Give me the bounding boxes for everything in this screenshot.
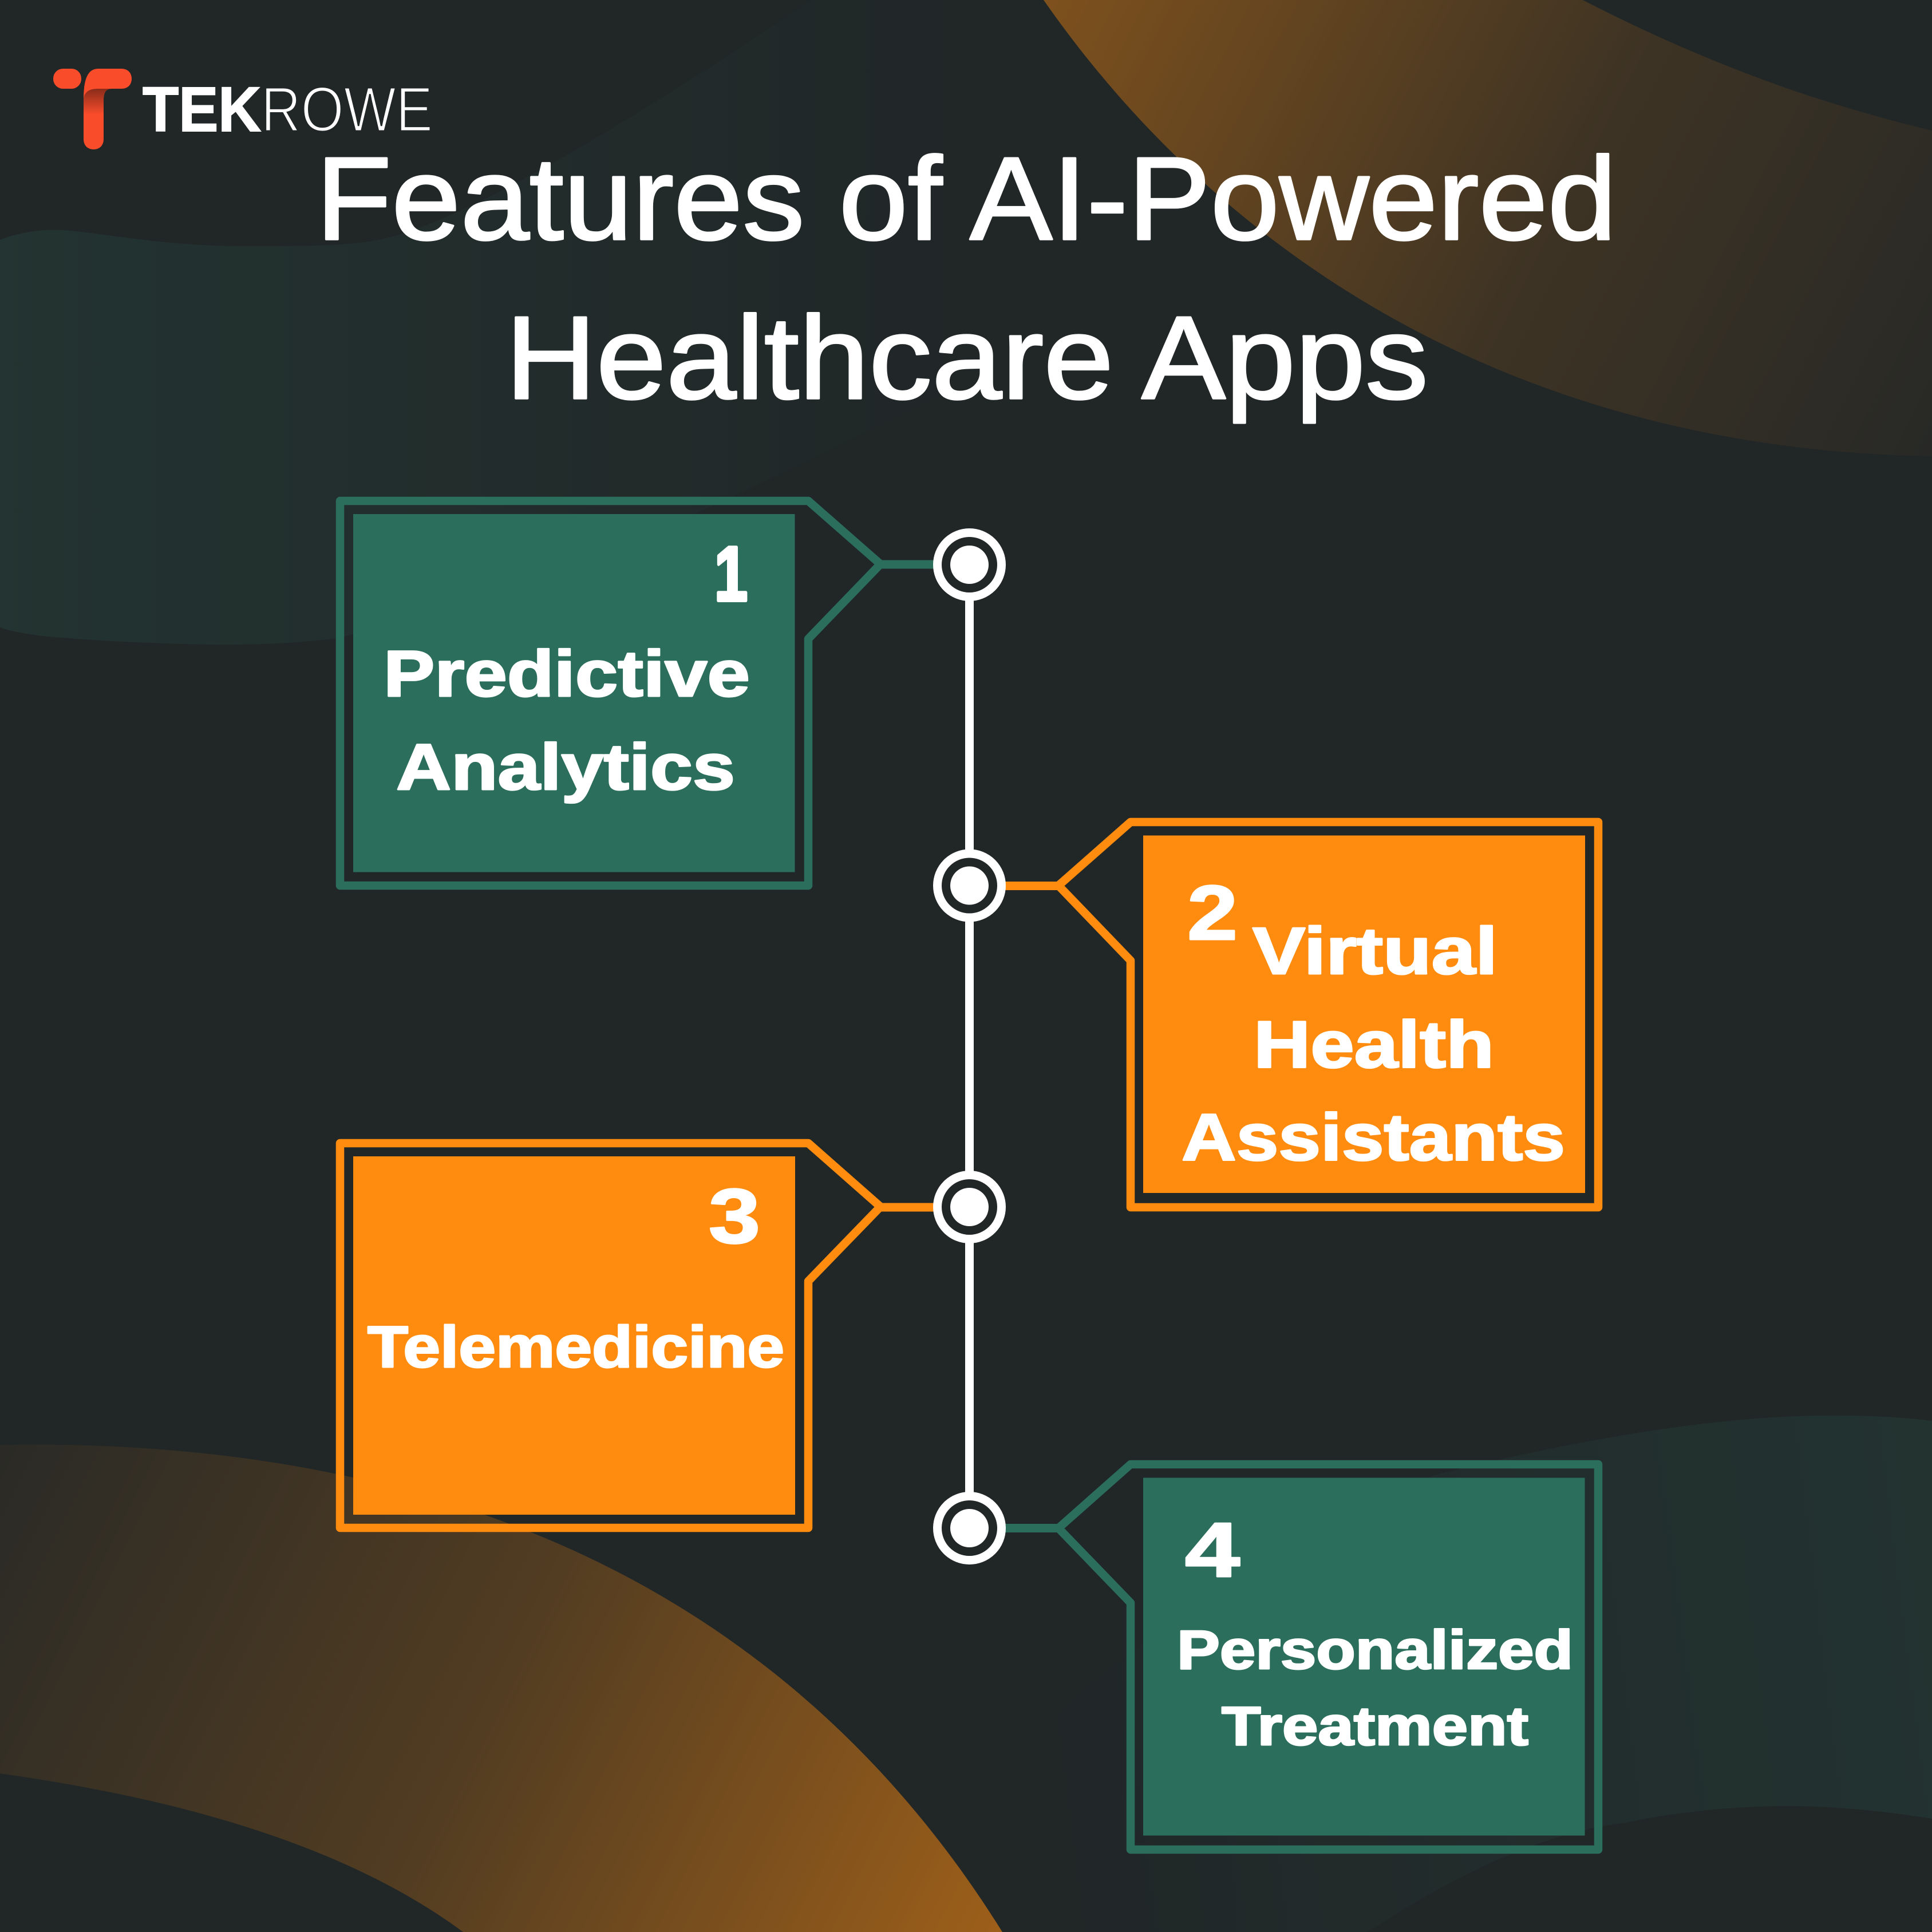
connector: node 1 — [878, 560, 939, 569]
label: Virtual — [1253, 914, 1498, 988]
label: Health — [1254, 1008, 1494, 1082]
connector: node 2 — [999, 882, 1061, 890]
panel 1: Predictive Analytics — [340, 501, 880, 886]
background: teal wave left — [0, 0, 1088, 645]
logo wordmark — [143, 74, 433, 145]
panel 3: Telemedicine — [340, 1143, 880, 1528]
connector: node 4 — [999, 1524, 1061, 1532]
label: Assistants — [1182, 1100, 1565, 1175]
background: teal wave right — [973, 1416, 1932, 1932]
panel 2: Virtual Health Assistants — [1058, 822, 1598, 1207]
background: orange band top right — [1044, 0, 1932, 456]
number 3: 3 — [709, 1173, 760, 1259]
timeline spine — [878, 532, 1061, 1560]
label: Analytics — [396, 731, 735, 804]
title: Healthcare Apps — [505, 292, 1428, 424]
background: orange band bottom left — [0, 1444, 1002, 1932]
title: Features of AI-Powered — [316, 133, 1617, 264]
label — [1182, 914, 1565, 1175]
number 1: 1 — [714, 531, 748, 617]
label: Telemedicine — [368, 1314, 784, 1380]
logo wordmark: TEK — [143, 74, 261, 145]
node 4 — [938, 1496, 1002, 1560]
logo — [53, 69, 433, 149]
label — [1177, 1619, 1573, 1757]
node 3 — [938, 1175, 1002, 1239]
label: Predictive — [384, 638, 750, 710]
label: Treatment — [1222, 1696, 1528, 1757]
label: Personalized — [1177, 1619, 1573, 1681]
label — [384, 638, 750, 804]
panel 4: Personalized Treatment — [1058, 1464, 1598, 1850]
node 2 — [938, 854, 1002, 918]
number 2: 2 — [1187, 870, 1238, 956]
logo wordmark: ROWE — [261, 74, 433, 145]
connector: node 3 — [878, 1203, 939, 1211]
node 1 — [938, 532, 1002, 596]
logo icon: orange T mark — [53, 69, 132, 149]
number 4: 4 — [1185, 1507, 1240, 1593]
title — [316, 133, 1617, 424]
